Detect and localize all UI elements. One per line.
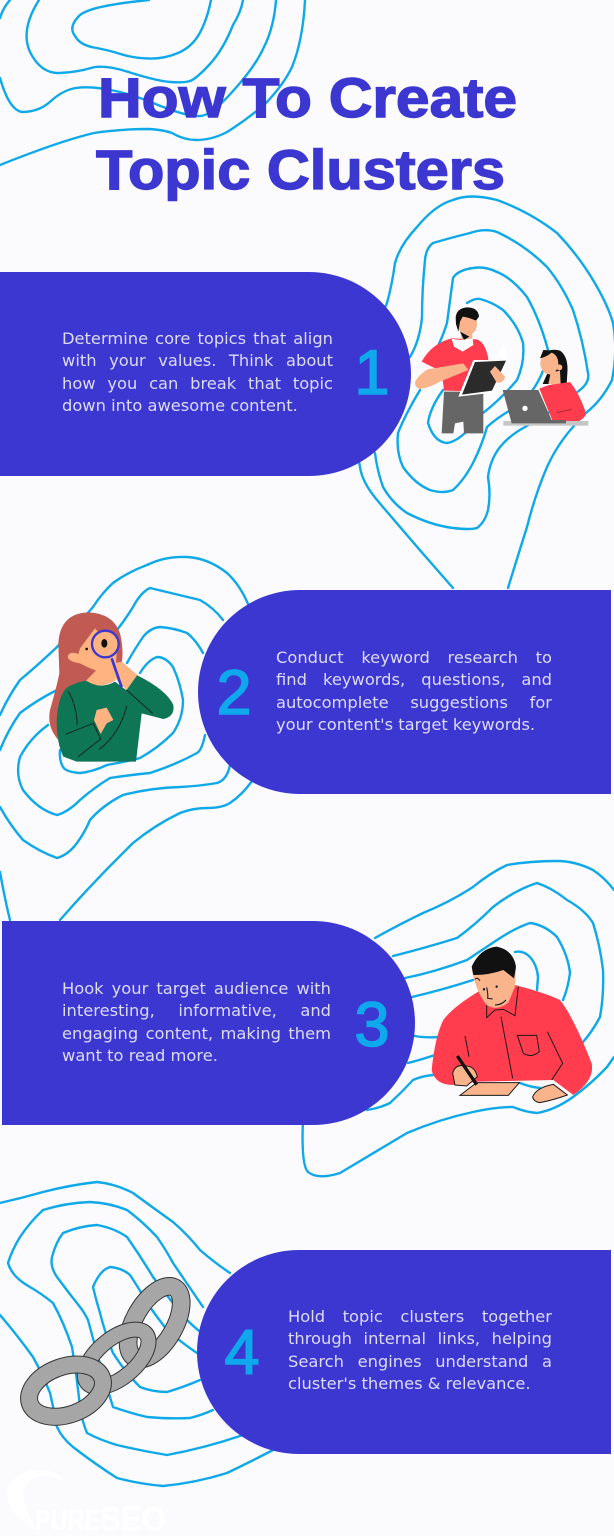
- step 3 text: Hook your target audience with: [62, 979, 331, 998]
- step 1 text: down into awesome content.: [62, 396, 298, 415]
- sweater folds: [66, 690, 153, 757]
- step 3 text: interesting, informative, and: [62, 1001, 331, 1020]
- man with tablet: [415, 307, 508, 433]
- link 2: [75, 1319, 158, 1398]
- link 3: [117, 1278, 192, 1368]
- title line 1: How To Create: [98, 66, 517, 129]
- writing hand: [453, 1065, 477, 1086]
- facial features: [475, 978, 506, 1005]
- step 4 text: cluster's themes & relevance.: [288, 1374, 531, 1393]
- step 2 number: 2: [216, 658, 252, 728]
- illustration: woman with magnifying glass: [49, 612, 174, 762]
- contours: right of step 3: [303, 861, 614, 1176]
- step 1 text: with your values. Think about: [62, 351, 333, 370]
- step 2 text: find keywords, questions, and: [276, 670, 552, 689]
- step 4 text: Hold topic clusters together: [288, 1307, 552, 1326]
- contours: top left: [0, 0, 305, 165]
- step 3 text: [62, 979, 331, 1065]
- step 3 text: engaging content, making them: [62, 1024, 331, 1043]
- step 4 text: [288, 1307, 552, 1393]
- logo: PureSEO watermark: [7, 1470, 166, 1536]
- pen: [457, 1056, 477, 1085]
- step 1 number: 1: [354, 338, 390, 408]
- green sweater: [57, 675, 174, 762]
- woman at laptop: [503, 350, 588, 426]
- illustration: man writing at desk: [432, 947, 592, 1103]
- step 2 text: [276, 648, 552, 734]
- step 4 text: through internal links, helping: [288, 1329, 552, 1348]
- illustration: chain links: [22, 1278, 192, 1426]
- contours: right of step 1: [356, 196, 614, 588]
- link 1: [22, 1355, 110, 1426]
- panel: step 1: [0, 272, 411, 476]
- face and neck: [68, 628, 117, 685]
- hair: [472, 947, 516, 978]
- step 4 number: 4: [224, 1318, 260, 1388]
- face: [472, 968, 516, 1008]
- hair: [49, 612, 123, 740]
- raised hand: [106, 662, 137, 690]
- magnifying glass: [112, 658, 122, 687]
- panel: step 4: [197, 1250, 611, 1454]
- paper: [460, 1083, 519, 1095]
- step 1 text: how you can break that topic: [62, 374, 333, 393]
- link 1 over link 2: [22, 1355, 110, 1426]
- lower hand: [94, 708, 113, 734]
- title line 2: Topic Clusters: [96, 138, 505, 201]
- link 2 over link 1: [75, 1319, 158, 1398]
- resting hand: [533, 1084, 567, 1103]
- step 3 text: want to read more.: [62, 1046, 218, 1065]
- red shirt: [432, 985, 592, 1095]
- step 2 text: your content's target keywords.: [276, 715, 535, 734]
- link 3 over link 2: [117, 1278, 192, 1368]
- step 2 text: Conduct keyword research to: [276, 648, 552, 667]
- step 2 text: autocomplete suggestions for: [276, 693, 552, 712]
- logo swoosh: [7, 1470, 65, 1530]
- shirt details: [465, 987, 563, 1080]
- contours: left of step 2: [0, 557, 252, 920]
- step 1 text: Determine core topics that align: [62, 329, 333, 348]
- panel: step 3: [2, 921, 415, 1125]
- panel: step 2: [198, 590, 611, 794]
- contours: around step 4: [0, 1182, 273, 1486]
- illustration: man with tablet and woman with laptop: [415, 307, 588, 433]
- step 3 number: 3: [354, 990, 390, 1060]
- step 4 text: Search engines understand a: [288, 1352, 552, 1371]
- step 1 text: [62, 329, 333, 415]
